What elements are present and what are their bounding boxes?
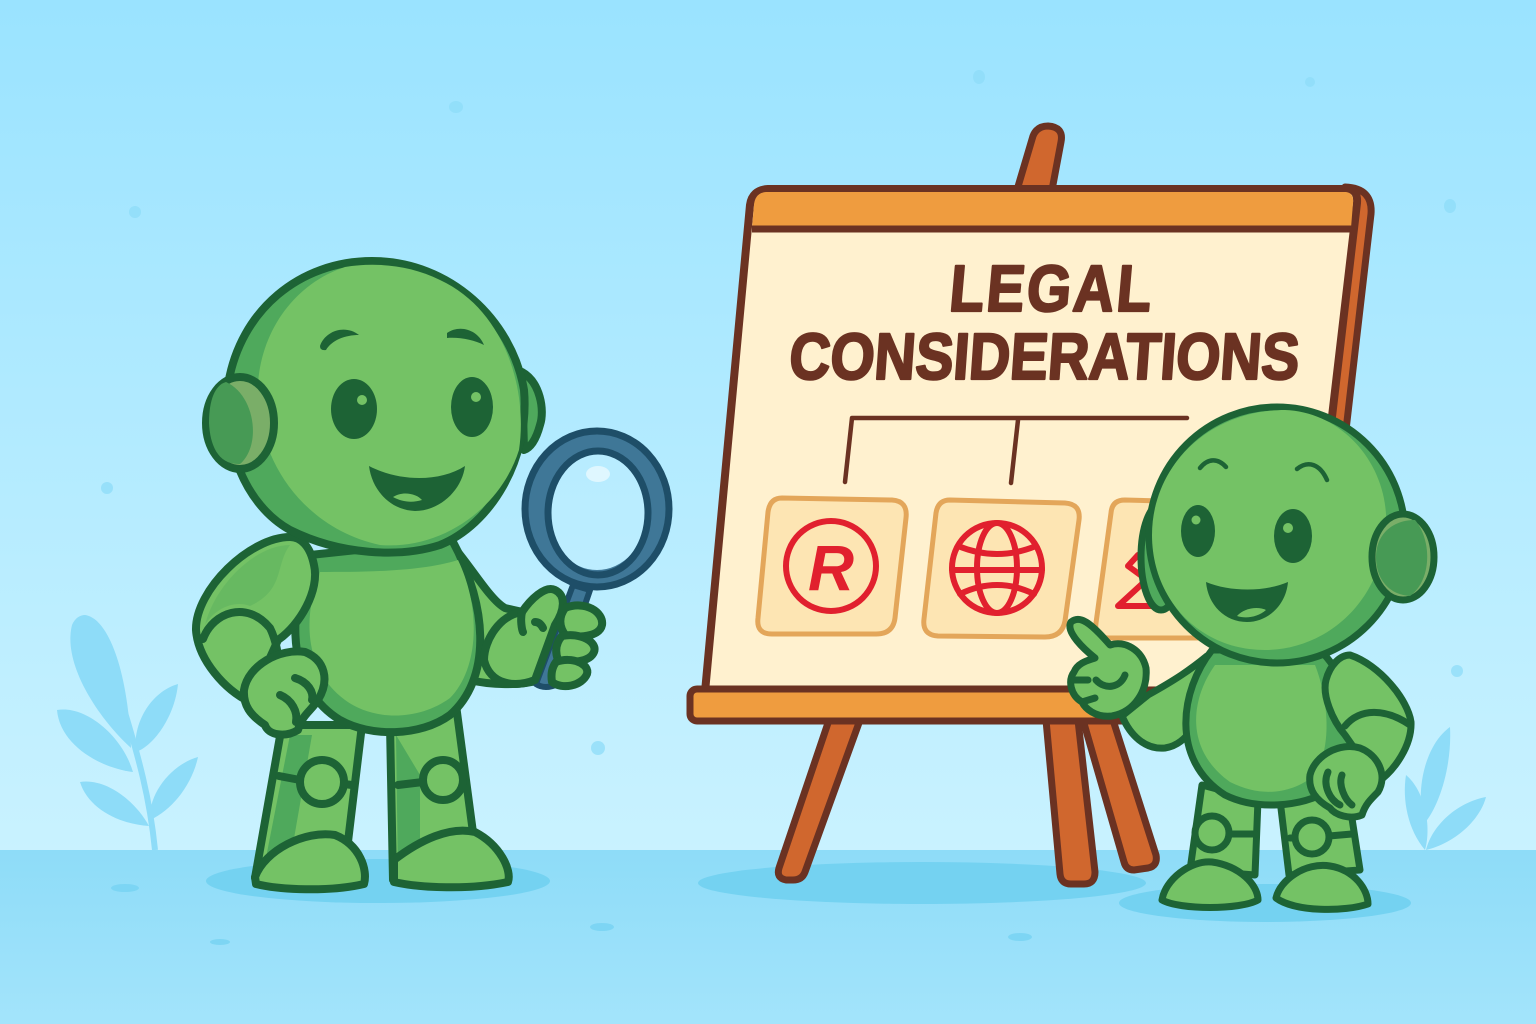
gripping hand bbox=[484, 589, 602, 686]
easel legs bbox=[778, 720, 1156, 884]
legs bbox=[255, 705, 509, 889]
ledge bbox=[690, 689, 1130, 721]
icon card: registered trademark: R bbox=[808, 532, 854, 604]
legs bbox=[1162, 780, 1368, 909]
icon card: partially hidden bbox=[1096, 500, 1200, 638]
right ear bbox=[522, 372, 542, 450]
board back edge bbox=[1320, 187, 1371, 430]
body bbox=[295, 540, 480, 732]
right arm bbox=[452, 545, 545, 684]
right hand bbox=[1310, 747, 1382, 817]
mouth bbox=[369, 466, 465, 511]
easel mast bbox=[1017, 126, 1061, 190]
left ear bbox=[206, 377, 274, 469]
easel bbox=[690, 126, 1371, 884]
background dots bbox=[101, 70, 1463, 945]
right foot bbox=[1276, 865, 1368, 909]
face bbox=[1181, 460, 1327, 622]
left arm bbox=[1122, 656, 1207, 748]
right plant bbox=[1405, 727, 1486, 850]
connector lines bbox=[845, 418, 1187, 483]
pointing hand bbox=[1070, 619, 1146, 716]
head bbox=[1149, 407, 1405, 663]
left hand bbox=[244, 651, 324, 735]
icon card: globe bbox=[924, 500, 1079, 637]
right upper arm bbox=[1325, 655, 1411, 782]
ground bbox=[0, 850, 1536, 1024]
heading bbox=[787, 252, 1302, 394]
mouth bbox=[1206, 582, 1288, 622]
face bbox=[320, 329, 493, 511]
robot right pointing bbox=[1070, 407, 1434, 909]
head bbox=[227, 261, 525, 553]
right foot bbox=[394, 831, 509, 887]
robot left with magnifier bbox=[196, 261, 669, 889]
magnifier bbox=[525, 431, 669, 687]
icon card: registered trademark bbox=[758, 498, 906, 634]
left foot bbox=[255, 834, 365, 889]
left plant bbox=[57, 615, 198, 850]
board header strip bbox=[752, 192, 1353, 228]
heading: LEGAL bbox=[947, 252, 1155, 326]
left ear bbox=[1141, 504, 1181, 610]
right ear bbox=[1372, 514, 1434, 600]
upper arm bbox=[196, 537, 315, 702]
heading: CONSIDERATIONS bbox=[787, 320, 1302, 394]
left foot bbox=[1162, 862, 1258, 908]
ground shadows bbox=[206, 859, 1411, 922]
body bbox=[1186, 650, 1353, 805]
board bbox=[705, 189, 1357, 692]
